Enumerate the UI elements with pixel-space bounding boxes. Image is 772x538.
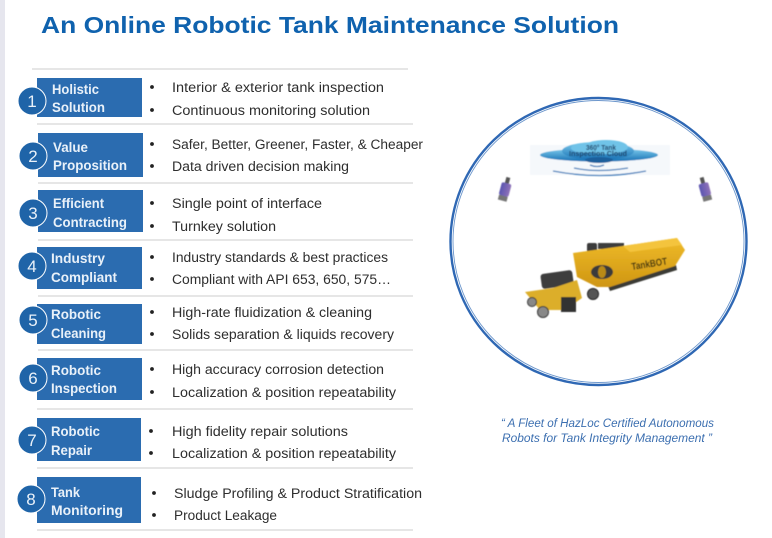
tank outline circle bbox=[450, 98, 746, 385]
row 3: Efficient Contracting: 3 bbox=[28, 204, 38, 223]
row 3: Efficient Contracting: Contracting bbox=[53, 214, 127, 230]
row 8: Tank Monitoring: Product Leakage bbox=[174, 508, 277, 524]
row 4: Industry Compliant: Compliant with API 653, 650, 575… bbox=[172, 272, 391, 288]
icon: inspection cloud: Inspection Cloud bbox=[569, 151, 627, 158]
row 8: Tank Monitoring: Tank bbox=[51, 484, 80, 500]
row 3: Efficient Contracting: Efficient bbox=[53, 195, 104, 211]
icon: TankBOT robot bbox=[525, 238, 685, 318]
icon: inspection cloud bbox=[530, 140, 670, 176]
row 1: Holistic Solution: 1 bbox=[27, 92, 37, 111]
row 1: Holistic Solution: Interior & exterior tank inspection bbox=[172, 80, 384, 96]
row 1: Holistic Solution: Solution bbox=[52, 99, 105, 115]
row 6: Robotic Inspection: Robotic bbox=[51, 362, 101, 378]
row 4: Industry Compliant: 4 bbox=[27, 257, 37, 276]
row 2: Value Proposition: Proposition bbox=[53, 157, 127, 173]
row 4: Industry Compliant: Industry bbox=[51, 250, 105, 266]
row 5: Robotic Cleaning bbox=[19, 304, 395, 344]
icon: TankBOT robot: TankBOT bbox=[631, 256, 668, 273]
row 8: Tank Monitoring: Sludge Profiling & Product Stratification bbox=[174, 486, 422, 502]
row 1: Holistic Solution: Continuous monitoring solution bbox=[172, 103, 370, 119]
row 2: Value Proposition: 2 bbox=[28, 147, 38, 166]
row 5: Robotic Cleaning: Robotic bbox=[51, 306, 101, 322]
row 2: Value Proposition: Value bbox=[53, 139, 88, 155]
row 3: Efficient Contracting bbox=[19, 190, 322, 235]
row 2: Value Proposition: Data driven decision making bbox=[172, 159, 349, 175]
row 6: Robotic Inspection: High accuracy corrosion detection bbox=[172, 362, 384, 378]
row 2: Value Proposition bbox=[19, 133, 423, 177]
row 5: Robotic Cleaning: Solids separation & liquids recovery bbox=[172, 327, 395, 343]
row 7: Robotic Repair: Repair bbox=[51, 442, 93, 458]
row 6: Robotic Inspection bbox=[19, 358, 397, 401]
row 7: Robotic Repair: Localization & position repeatability bbox=[172, 446, 397, 462]
icon: right sensor bbox=[697, 176, 713, 202]
row 5: Robotic Cleaning: High-rate fluidization & cleaning bbox=[172, 305, 372, 321]
row 5: Robotic Cleaning: Cleaning bbox=[51, 325, 106, 341]
row 1: Holistic Solution bbox=[18, 78, 384, 119]
row 7: Robotic Repair bbox=[18, 418, 397, 462]
row 4: Industry Compliant: Compliant bbox=[51, 269, 117, 285]
row 2: Value Proposition: Safer, Better, Greener, Faster, & Cheaper bbox=[172, 137, 423, 153]
row 8: Tank Monitoring: Monitoring bbox=[51, 502, 123, 518]
row 7: Robotic Repair: Robotic bbox=[51, 423, 100, 439]
quote caption: “ A Fleet of HazLoc Certified Autonomous bbox=[501, 418, 714, 430]
row 6: Robotic Inspection: Inspection bbox=[51, 380, 117, 396]
row 6: Robotic Inspection: Localization & position repeatability bbox=[172, 385, 397, 401]
title: An Online Robotic Tank Maintenance Solution bbox=[41, 12, 619, 38]
row 6: Robotic Inspection: 6 bbox=[28, 369, 38, 388]
row 7: Robotic Repair: 7 bbox=[27, 431, 37, 450]
row 4: Industry Compliant bbox=[18, 247, 391, 289]
row 3: Efficient Contracting: Single point of interface bbox=[172, 196, 322, 212]
icon: inspection cloud: 360° Tank bbox=[586, 144, 616, 152]
row 8: Tank Monitoring bbox=[17, 477, 422, 524]
quote caption: Robots for Tank Integrity Management ” bbox=[502, 433, 713, 445]
row 5: Robotic Cleaning: 5 bbox=[28, 311, 38, 330]
quote caption bbox=[501, 418, 714, 445]
row 4: Industry Compliant: Industry standards & best practices bbox=[172, 250, 388, 266]
row 3: Efficient Contracting: Turnkey solution bbox=[172, 219, 276, 235]
icon: left sensor bbox=[497, 176, 513, 202]
row 7: Robotic Repair: High fidelity repair solutions bbox=[172, 424, 348, 440]
row 1: Holistic Solution: Holistic bbox=[52, 81, 99, 97]
row 8: Tank Monitoring: 8 bbox=[26, 490, 36, 509]
